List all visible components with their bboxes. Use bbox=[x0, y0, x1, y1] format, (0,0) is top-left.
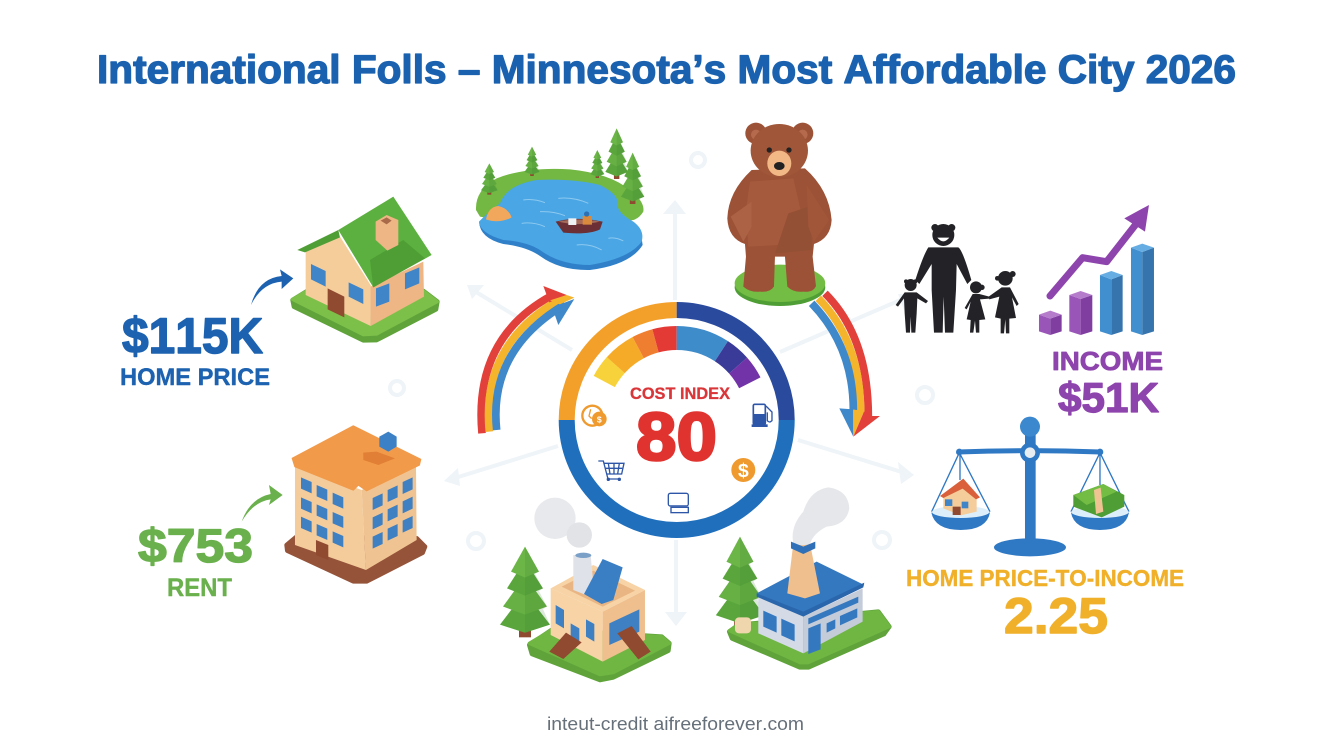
rainbow arrow: right bbox=[812, 293, 880, 437]
right pan with cash bbox=[1071, 484, 1129, 530]
metric: home price-to-income bbox=[906, 565, 1184, 644]
child left bbox=[896, 279, 928, 333]
smoke bbox=[793, 487, 849, 545]
label: HOME PRICE-TO-INCOME bbox=[906, 565, 1184, 591]
gauge icons: $ bbox=[738, 461, 749, 482]
child middle bbox=[965, 281, 989, 333]
metric: home price bbox=[120, 308, 270, 391]
adult bbox=[915, 224, 971, 333]
arrow: to apartment bbox=[242, 485, 283, 522]
gauge label: COST INDEX bbox=[630, 384, 731, 403]
chart: income bars with rising arrow bbox=[1039, 205, 1154, 335]
left pan with house bbox=[931, 479, 990, 530]
metric: income bbox=[1052, 346, 1163, 421]
title: International Folls – Minnesota’s Most Affordable City 2026 bbox=[97, 48, 1236, 92]
rainbow arrow: left bbox=[481, 286, 574, 433]
icon: lake with boat and trees bbox=[476, 128, 644, 270]
trend arrow bbox=[1050, 205, 1149, 296]
arrow: to house bbox=[251, 269, 293, 305]
value: 2.25 bbox=[1004, 588, 1108, 644]
gauge icons: $ bbox=[597, 414, 602, 424]
icon: brown bear on green base bbox=[727, 123, 832, 306]
metric: rent bbox=[138, 519, 253, 602]
label: INCOME bbox=[1052, 346, 1163, 376]
label: RENT bbox=[167, 574, 232, 602]
value: $115K bbox=[122, 308, 263, 364]
icon: apartment building bbox=[287, 426, 425, 581]
child right bbox=[989, 271, 1019, 333]
icon: family silhouette bbox=[896, 224, 1019, 333]
gauge ring bbox=[567, 310, 787, 530]
faint radial arrows and rings bbox=[390, 153, 933, 626]
panel: cost index gauge bbox=[567, 310, 787, 530]
value: $753 bbox=[138, 519, 253, 572]
value: $51K bbox=[1058, 374, 1159, 421]
gauge icons bbox=[582, 404, 772, 513]
strings bbox=[932, 453, 1129, 512]
icon: balance scale bbox=[931, 417, 1129, 556]
icon: factory bbox=[716, 487, 889, 667]
boat bbox=[556, 211, 603, 233]
icon: paper mill bbox=[500, 498, 669, 680]
bars bbox=[1039, 244, 1154, 335]
footer credit: inteut-credit aifreeforever.com bbox=[547, 714, 804, 734]
gauge value: 80 bbox=[636, 399, 717, 475]
label: HOME PRICE bbox=[120, 364, 270, 391]
gauge colour arc bbox=[604, 338, 750, 383]
icon: green-roof house bbox=[293, 197, 437, 340]
